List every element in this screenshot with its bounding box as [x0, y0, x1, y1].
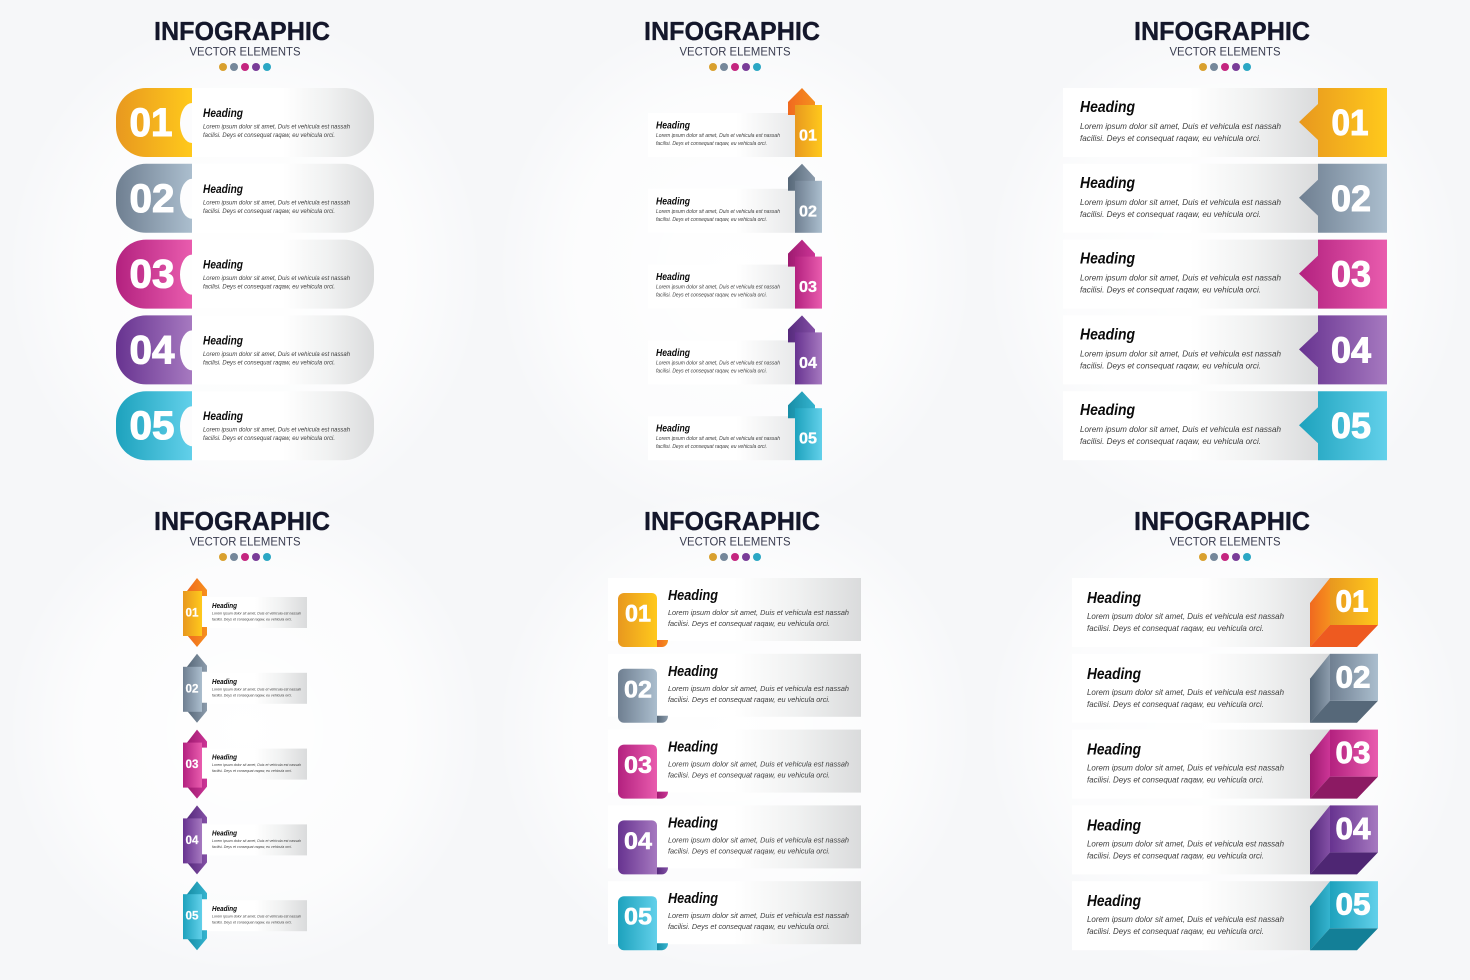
row 01: 01 [130, 101, 172, 145]
row 02 [116, 164, 374, 233]
row 01: Lorem ipsum dolor sit amet, Duis et vehicula est nassah [1087, 611, 1284, 621]
row 05: Heading [656, 424, 690, 435]
row 04: 04 [624, 828, 652, 855]
row 01 [1072, 578, 1378, 647]
row 02 [648, 164, 822, 233]
row 03 [183, 730, 307, 799]
row 03: Heading [656, 272, 690, 283]
row 03: Lorem ipsum dolor sit amet, Duis et vehicula est nassah [1080, 273, 1281, 283]
row 04 [1072, 805, 1378, 874]
row 04: Lorem ipsum dolor sit amet, Duis et vehicula est nassah [212, 839, 301, 843]
row 01: facilisi. Deys et consequat raqaw, eu vehicula orci. [1080, 133, 1261, 143]
row 01 [116, 88, 374, 157]
row 05 [608, 881, 861, 950]
row 03: facilisi. Deys et consequat raqaw, eu vehicula orci. [1087, 775, 1264, 785]
row 03: facilisi. Deys et consequat raqaw, eu vehicula orci. [212, 769, 292, 773]
row 04: Lorem ipsum dolor sit amet, Duis et vehicula est nassah [1080, 348, 1281, 358]
row 04: Heading [203, 333, 244, 347]
row 03: Lorem ipsum dolor sit amet, Duis et vehicula est nassah [212, 763, 301, 767]
panel: 3D cubes bottom right [1072, 506, 1378, 950]
row 03: Heading [1080, 251, 1135, 268]
row 01: Heading [1087, 590, 1141, 607]
row 02: facilisi. Deys et consequat raqaw, eu vehicula orci. [1080, 209, 1261, 219]
row 03 [608, 730, 861, 799]
title block: VECTOR ELEMENTS [190, 534, 300, 548]
row 02: Lorem ipsum dolor sit amet, Duis et vehicula est nassah [212, 687, 301, 691]
row 02: 02 [186, 681, 199, 695]
row 02: Heading [1080, 175, 1135, 192]
row 04: Lorem ipsum dolor sit amet, Duis et vehicula est nassah [668, 835, 849, 844]
title block [1134, 16, 1310, 71]
row 03 [1072, 730, 1378, 799]
row 02 [1072, 654, 1378, 723]
row 01: 01 [1332, 102, 1368, 143]
row 02 [1063, 164, 1387, 233]
row 03: Heading [1087, 742, 1141, 759]
row 02: 02 [130, 177, 174, 221]
row 03: Lorem ipsum dolor sit amet, Duis et vehicula est nassah [668, 760, 849, 769]
panel: rolled tabs bottom centre [608, 506, 861, 950]
row 01: Lorem ipsum dolor sit amet, Duis et vehicula est nassah [656, 133, 780, 139]
row 01: 01 [186, 606, 199, 620]
row 04: 04 [1331, 329, 1371, 370]
row 05: facilisi. Deys et consequat raqaw, eu vehicula orci. [1080, 436, 1261, 446]
row 03: 03 [799, 279, 817, 296]
title block [644, 506, 820, 561]
row 03 [648, 240, 822, 309]
row 01: Heading [668, 588, 718, 604]
row 05: 05 [1336, 887, 1370, 922]
panel: left-pointing tags top right [1063, 16, 1387, 460]
row 05: Heading [1087, 893, 1141, 910]
row 02: Heading [212, 677, 237, 686]
row 04: Heading [1080, 326, 1135, 343]
title block: INFOGRAPHIC [154, 16, 330, 46]
row 03: Heading [203, 258, 244, 272]
row 02: 02 [1331, 178, 1371, 219]
row 05 [648, 391, 822, 460]
row 04 [608, 805, 861, 874]
row 04: facilisi. Deys et consequat raqaw, eu vehicula orci. [203, 359, 335, 366]
row 02: Heading [1087, 666, 1141, 683]
row 01: Lorem ipsum dolor sit amet, Duis et vehicula est nassah [668, 608, 849, 617]
row 05 [183, 881, 307, 950]
row 04 [183, 805, 307, 874]
row 05 [1072, 881, 1378, 950]
row 04: 04 [799, 355, 817, 372]
row 05: facilisi. Deys et consequat raqaw, eu vehicula orci. [1087, 926, 1264, 936]
row 03 [1063, 240, 1387, 309]
row 04: facilisi. Deys et consequat raqaw, eu vehicula orci. [1080, 360, 1261, 370]
row 05: facilisi. Deys et consequat raqaw, eu vehicula orci. [656, 444, 767, 450]
row 05: 05 [186, 909, 199, 923]
row 03: facilisi. Deys et consequat raqaw, eu vehicula orci. [668, 771, 830, 780]
row 05: facilisi. Deys et consequat raqaw, eu vehicula orci. [668, 922, 830, 931]
row 05: Lorem ipsum dolor sit amet, Duis et vehicula est nassah [212, 915, 301, 919]
row 01: Lorem ipsum dolor sit amet, Duis et vehicula est nassah [212, 612, 301, 616]
row 04: facilisi. Deys et consequat raqaw, eu vehicula orci. [668, 846, 830, 855]
row 03: Lorem ipsum dolor sit amet, Duis et vehicula est nassah [656, 285, 780, 291]
row 05: Lorem ipsum dolor sit amet, Duis et vehicula est nassah [656, 436, 780, 442]
row 05: Lorem ipsum dolor sit amet, Duis et vehicula est nassah [1080, 424, 1281, 434]
row 04: facilisi. Deys et consequat raqaw, eu vehicula orci. [212, 845, 292, 849]
row 05: Heading [203, 409, 244, 423]
row 04 [648, 315, 822, 384]
row 02: Lorem ipsum dolor sit amet, Duis et vehicula est nassah [668, 684, 849, 693]
row 05 [116, 391, 374, 460]
row 04 [116, 315, 374, 384]
row 05: Lorem ipsum dolor sit amet, Duis et vehicula est nassah [668, 911, 849, 920]
row 04: facilisi. Deys et consequat raqaw, eu vehicula orci. [656, 368, 767, 374]
row 04: 04 [130, 328, 175, 372]
row 01: 01 [799, 128, 817, 144]
title block [154, 16, 330, 71]
row 04: facilisi. Deys et consequat raqaw, eu vehicula orci. [1087, 850, 1264, 860]
title block: VECTOR ELEMENTS [1170, 534, 1280, 548]
title block: INFOGRAPHIC [1134, 506, 1310, 536]
row 05: 05 [624, 904, 652, 931]
row 03: 03 [186, 757, 199, 771]
row 02 [183, 654, 307, 723]
row 01: facilisi. Deys et consequat raqaw, eu vehicula orci. [668, 619, 830, 628]
title block: INFOGRAPHIC [644, 506, 820, 536]
title block [154, 506, 330, 561]
row 02: Heading [656, 196, 690, 207]
panel: rounded pills top left [116, 16, 374, 460]
row 01 [1063, 88, 1387, 157]
row 01: Lorem ipsum dolor sit amet, Duis et vehicula est nassah [1080, 121, 1281, 131]
row 03 [116, 240, 374, 309]
row 01: 01 [1336, 584, 1368, 618]
row 05: Lorem ipsum dolor sit amet, Duis et vehicula est nassah [203, 427, 351, 434]
row 01: facilisi. Deys et consequat raqaw, eu vehicula orci. [1087, 623, 1264, 633]
title block [644, 16, 820, 71]
row 02: facilisi. Deys et consequat raqaw, eu vehicula orci. [203, 208, 335, 215]
row 03: facilisi. Deys et consequat raqaw, eu vehicula orci. [656, 293, 767, 299]
row 02: facilisi. Deys et consequat raqaw, eu vehicula orci. [212, 693, 292, 697]
row 02: 02 [624, 676, 652, 703]
row 04: Lorem ipsum dolor sit amet, Duis et vehicula est nassah [203, 351, 351, 358]
row 01 [608, 578, 861, 647]
row 02: facilisi. Deys et consequat raqaw, eu vehicula orci. [1087, 699, 1264, 709]
row 03: Lorem ipsum dolor sit amet, Duis et vehicula est nassah [1087, 763, 1284, 773]
row 02: Lorem ipsum dolor sit amet, Duis et vehicula est nassah [1087, 687, 1284, 697]
row 01: facilisi. Deys et consequat raqaw, eu vehicula orci. [212, 618, 292, 622]
row 02: Lorem ipsum dolor sit amet, Duis et vehicula est nassah [656, 209, 780, 215]
row 02: Heading [203, 182, 244, 196]
row 01: facilisi. Deys et consequat raqaw, eu vehicula orci. [656, 141, 767, 147]
row 01: Heading [656, 120, 690, 132]
row 03: Heading [668, 740, 718, 756]
row 05: Heading [668, 891, 718, 907]
row 05: 05 [1331, 405, 1371, 446]
row 05: facilisi. Deys et consequat raqaw, eu vehicula orci. [203, 435, 335, 442]
row 02: Lorem ipsum dolor sit amet, Duis et vehicula est nassah [1080, 197, 1281, 207]
row 03: 03 [1331, 254, 1371, 295]
panel: up arrows top centre [644, 16, 822, 460]
row 03: 03 [624, 752, 652, 779]
title block: VECTOR ELEMENTS [1170, 44, 1280, 58]
row 03: Heading [212, 753, 237, 762]
row 01: Heading [203, 106, 244, 120]
row 05: 05 [130, 404, 174, 448]
row 01: 01 [625, 600, 651, 628]
row 05: Heading [212, 904, 237, 913]
title block: VECTOR ELEMENTS [680, 44, 790, 58]
row 04: Heading [1087, 817, 1141, 834]
panel: double arrows bottom left [154, 506, 330, 950]
row 03: facilisi. Deys et consequat raqaw, eu vehicula orci. [1080, 285, 1261, 295]
row 02: 02 [1336, 659, 1370, 694]
row 05: facilisi. Deys et consequat raqaw, eu vehicula orci. [212, 921, 292, 925]
row 01: Lorem ipsum dolor sit amet, Duis et vehicula est nassah [203, 124, 351, 130]
row 05: 05 [799, 431, 817, 448]
row 04: Lorem ipsum dolor sit amet, Duis et vehicula est nassah [1087, 838, 1284, 848]
row 05: Heading [1080, 402, 1135, 419]
row 04: 04 [186, 833, 199, 847]
row 01 [183, 578, 307, 647]
row 04: Lorem ipsum dolor sit amet, Duis et vehicula est nassah [656, 360, 780, 366]
row 03: 03 [1336, 735, 1370, 770]
row 01: facilisi. Deys et consequat raqaw, eu vehicula orci. [203, 132, 335, 139]
row 03: facilisi. Deys et consequat raqaw, eu vehicula orci. [203, 284, 335, 291]
row 02 [608, 654, 861, 723]
title block: INFOGRAPHIC [154, 506, 330, 536]
row 04: Heading [656, 348, 690, 359]
row 05 [1063, 391, 1387, 460]
row 02: Heading [668, 664, 718, 680]
row 02: facilisi. Deys et consequat raqaw, eu vehicula orci. [656, 217, 767, 223]
row 03: Lorem ipsum dolor sit amet, Duis et vehicula est nassah [203, 275, 351, 282]
row 01: Heading [1080, 99, 1135, 116]
row 02: Lorem ipsum dolor sit amet, Duis et vehicula est nassah [203, 199, 351, 206]
row 01 [648, 88, 822, 157]
row 03: 03 [130, 253, 174, 297]
row 05: Lorem ipsum dolor sit amet, Duis et vehicula est nassah [1087, 914, 1284, 924]
title block: VECTOR ELEMENTS [190, 44, 300, 58]
row 02: facilisi. Deys et consequat raqaw, eu vehicula orci. [668, 695, 830, 704]
title block: VECTOR ELEMENTS [680, 534, 790, 548]
row 04: Heading [212, 828, 237, 837]
row 01: Heading [212, 601, 237, 610]
row 04: Heading [668, 815, 718, 831]
title block: INFOGRAPHIC [644, 16, 820, 46]
row 04: 04 [1336, 811, 1371, 846]
title block [1134, 506, 1310, 561]
title block: INFOGRAPHIC [1134, 16, 1310, 46]
row 02: 02 [799, 203, 817, 220]
row 04 [1063, 315, 1387, 384]
